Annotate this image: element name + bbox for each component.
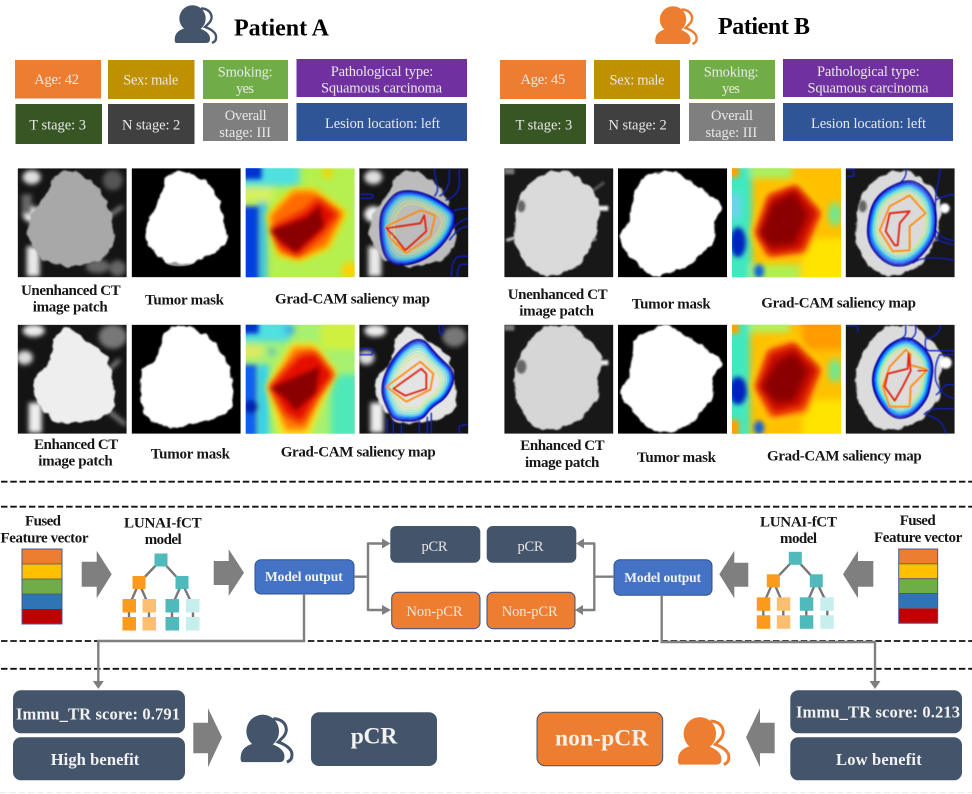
box: T stage: T stage: 3 (516, 117, 572, 133)
box: smoking: Smoking: (218, 64, 273, 80)
box: N stage (594, 104, 680, 144)
box: smoking (689, 60, 775, 99)
box: Non-pCR (487, 592, 575, 629)
arrows: output to pCR and non-pCR (575, 538, 614, 615)
chart: feature vector stack (899, 549, 938, 623)
icon: patient B (655, 6, 697, 44)
arrow: output to score (93, 594, 304, 689)
label: LUNAI-fCT model: model (145, 532, 182, 548)
box: overall stage (203, 103, 288, 141)
box: Non-pCR (392, 592, 480, 629)
box: pathological type: Squamous carcinoma (321, 80, 443, 96)
title: Patient A: Patient A (234, 16, 330, 42)
image: A enhanced CT (18, 324, 127, 434)
icon: patient A (175, 5, 216, 43)
box: Immu_TR score: Immu_TR score: 0.791 (16, 704, 180, 723)
labels: A enhanced row: Tumor mask (151, 446, 231, 462)
box: pCR (487, 526, 576, 563)
box: model output (614, 560, 712, 595)
box: pCR result (311, 712, 437, 766)
arrow: vector to model (843, 551, 873, 598)
box: pathological type: Squamous carcinoma (808, 80, 929, 96)
box: non-pCR result (537, 712, 663, 766)
labels: A enhanced row: Enhanced CT (34, 437, 118, 453)
box: pathological type (296, 59, 467, 97)
box: Immu_TR score: Immu_TR score: 0.213 (796, 703, 960, 722)
box: overall stage: stage: III (706, 125, 757, 141)
arrows: output to pCR and non-pCR (354, 538, 391, 615)
arrow: model to output (719, 551, 748, 598)
labels: B enhanced row (520, 438, 922, 471)
arrow: score to result (746, 708, 775, 767)
image: A unenhanced CT (18, 168, 127, 278)
label: LUNAI-fCT model (760, 514, 837, 547)
image: B unenhanced saliency contours (846, 168, 955, 278)
image: B enhanced tumor mask (618, 324, 727, 434)
labels: A enhanced row: image patch (38, 454, 113, 470)
box: N stage: N stage: 2 (608, 117, 667, 133)
labels: A unenhanced row: Unenhanced CT (21, 283, 121, 299)
box: lesion location (783, 103, 953, 141)
image: A unenhanced tumor mask (132, 168, 241, 278)
box: sex (108, 60, 194, 99)
box: T stage: T stage: 3 (29, 117, 86, 133)
box: smoking: yes (722, 81, 740, 97)
labels: A unenhanced row: Tumor mask (145, 292, 225, 308)
box: overall stage (689, 103, 775, 141)
panel: patient B image patches (504, 160, 955, 471)
labels: A enhanced row: Grad-CAM saliency map (281, 444, 436, 460)
box: model output: Model output (265, 569, 343, 584)
box: pCR: pCR (518, 539, 544, 555)
icon: patient B (678, 717, 729, 765)
box: pathological type (783, 59, 953, 97)
box: smoking: yes (236, 81, 254, 97)
labels: A enhanced row (34, 437, 436, 470)
box: non-pCR result: non-pCR (555, 726, 649, 752)
labels: B unenhanced row: Unenhanced CT (508, 287, 608, 303)
box: sex (594, 60, 680, 99)
image: B unenhanced CT (504, 168, 614, 278)
panel: patient A image patches (17, 160, 468, 470)
label: LUNAI-fCT model: LUNAI-fCT (124, 516, 202, 532)
box: Immu_TR score (790, 690, 962, 733)
box: pCR: pCR (422, 539, 448, 555)
labels: B unenhanced row: Tumor mask (632, 296, 711, 312)
box: lesion location: Lesion location: left (811, 116, 926, 132)
labels: B enhanced row: Tumor mask (637, 450, 717, 466)
box: lesion location: Lesion location: left (325, 116, 440, 132)
box: Non-pCR: Non-pCR (502, 604, 558, 620)
image: A unenhanced Grad-CAM heatmap (246, 168, 355, 278)
icon: decision tree (122, 554, 200, 630)
label: fused feature vector: Feature vector (874, 530, 963, 546)
box: T stage (500, 104, 586, 144)
box: pCR (390, 526, 480, 563)
box: pCR result: pCR (351, 723, 398, 749)
box: N stage: N stage: 2 (122, 117, 180, 133)
box: low benefit: Low benefit (836, 750, 922, 769)
labels: A unenhanced row (21, 283, 430, 316)
box: age: Age: 45 (520, 72, 565, 88)
panel: patient A header (15, 5, 467, 144)
labels: B unenhanced row: Grad-CAM saliency map (761, 296, 916, 312)
labels: B enhanced row: Enhanced CT (520, 438, 605, 454)
labels: A unenhanced row: Grad-CAM saliency map (275, 292, 430, 308)
box: overall stage: Overall (711, 108, 753, 124)
image: B enhanced saliency contours (846, 324, 955, 434)
panel: patient B header (500, 6, 953, 144)
box: model output (255, 560, 354, 594)
chart: feature vector stack (22, 549, 62, 624)
panel: model workflow patient A (0, 514, 480, 689)
image: B enhanced Grad-CAM heatmap (732, 324, 841, 434)
labels: B unenhanced row: image patch (519, 304, 595, 320)
label: fused feature vector (0, 514, 89, 547)
box: pathological type: Pathological type: (817, 64, 920, 80)
image: B unenhanced tumor mask (618, 168, 727, 278)
panel: model workflow patient B (487, 513, 963, 689)
arrow: vector to model (82, 551, 112, 598)
box: smoking: Smoking: (704, 64, 759, 80)
image: B unenhanced Grad-CAM heatmap (732, 168, 841, 278)
box: overall stage: Overall (225, 108, 267, 124)
label: fused feature vector: Feature vector (0, 531, 89, 547)
box: sex: Sex: male (123, 72, 178, 88)
box: T stage (16, 104, 102, 144)
label: LUNAI-fCT model: model (780, 531, 817, 547)
arrow: output to score (662, 595, 880, 689)
image: A enhanced saliency contours (359, 324, 468, 434)
box: high benefit (13, 737, 185, 780)
label: fused feature vector: Fused (25, 514, 62, 530)
panel: result patient A (13, 690, 437, 780)
box: age (15, 60, 101, 98)
box: sex: Sex: male (610, 72, 664, 88)
box: smoking (203, 60, 288, 99)
icon: patient A (241, 715, 292, 762)
box: lesion location (296, 103, 467, 141)
box: age: Age: 42 (34, 72, 79, 88)
image: A enhanced Grad-CAM heatmap (246, 324, 355, 434)
image: A unenhanced saliency contours (359, 168, 468, 278)
panel: result patient B (537, 690, 962, 780)
box: N stage (108, 104, 194, 144)
box: age (500, 60, 586, 99)
image: B enhanced CT (504, 324, 614, 434)
box: Non-pCR: Non-pCR (406, 604, 463, 620)
arrow: score to result (193, 708, 222, 767)
labels: B enhanced row: Grad-CAM saliency map (767, 449, 922, 465)
image: A enhanced tumor mask (132, 324, 241, 434)
box: Immu_TR score (13, 690, 185, 733)
labels: B unenhanced row (508, 287, 916, 320)
label: fused feature vector: Fused (900, 513, 936, 529)
arrow: model to output (214, 549, 244, 596)
labels: A unenhanced row: image patch (33, 300, 108, 316)
box: overall stage: stage: III (219, 125, 271, 141)
title: Patient B: Patient B (718, 14, 810, 40)
box: pathological type: Pathological type: (331, 64, 433, 80)
box: model output: Model output (624, 570, 702, 585)
labels: B enhanced row: image patch (525, 455, 600, 471)
label: LUNAI-fCT model (124, 516, 202, 548)
label: fused feature vector (874, 513, 963, 546)
box: high benefit: High benefit (51, 750, 140, 769)
icon: decision tree (757, 552, 834, 629)
box: low benefit (790, 737, 962, 780)
label: LUNAI-fCT model: LUNAI-fCT (760, 514, 837, 530)
